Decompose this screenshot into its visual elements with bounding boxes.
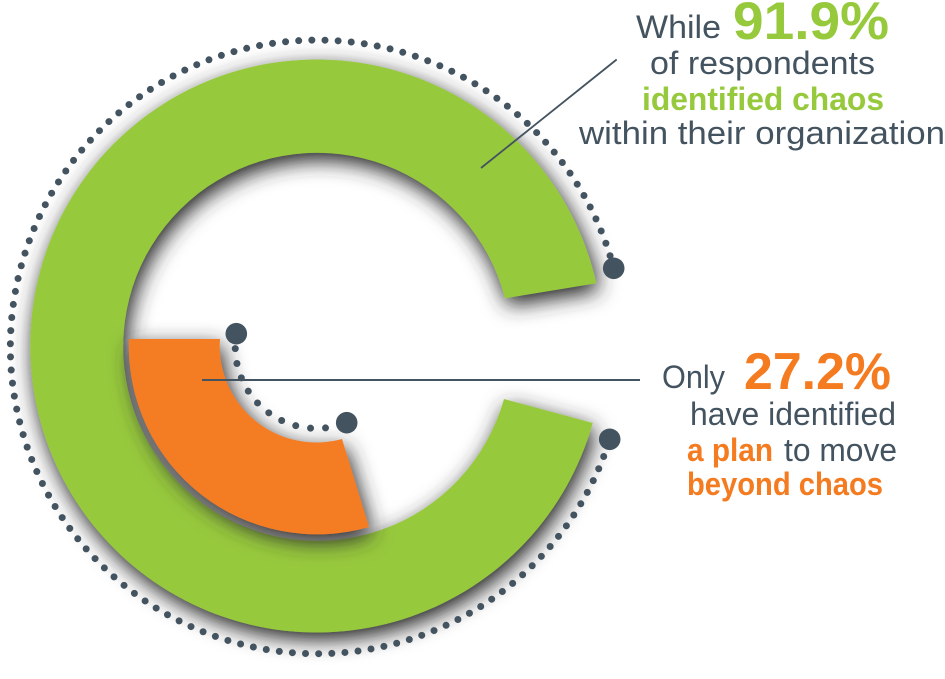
inner dotted arc xyxy=(235,334,347,428)
callout: 91.9%: While xyxy=(636,9,721,45)
marker: inner arc start xyxy=(226,323,247,345)
green arc: 91.9% identified chaos xyxy=(30,59,596,632)
marker: inner arc end xyxy=(336,412,358,434)
leader line to 27.2% callout xyxy=(202,379,640,381)
callout: 27.2%: 27.2% xyxy=(744,343,891,401)
callout: 91.9%: identified chaos xyxy=(642,81,884,117)
callout: 91.9%: within their organization xyxy=(578,115,945,151)
callout: 27.2% xyxy=(662,343,897,502)
callout: 27.2%: a plan xyxy=(687,432,773,468)
chart: chaos ring xyxy=(10,40,624,654)
marker: outer arc end xyxy=(599,428,620,450)
callout: 91.9%: of respondents xyxy=(650,45,875,81)
marker: outer arc start xyxy=(603,258,624,279)
callout: 27.2%: beyond chaos xyxy=(687,466,883,502)
callout: 27.2%: Only xyxy=(662,359,725,395)
leader line to 91.9% callout xyxy=(481,60,617,168)
callout: 91.9% xyxy=(578,0,945,151)
callout: 27.2%: to move xyxy=(784,432,897,468)
outer dotted arc xyxy=(10,40,614,654)
orange arc: 27.2% have a plan xyxy=(129,339,369,534)
callout: 27.2%: have identified xyxy=(690,396,896,432)
